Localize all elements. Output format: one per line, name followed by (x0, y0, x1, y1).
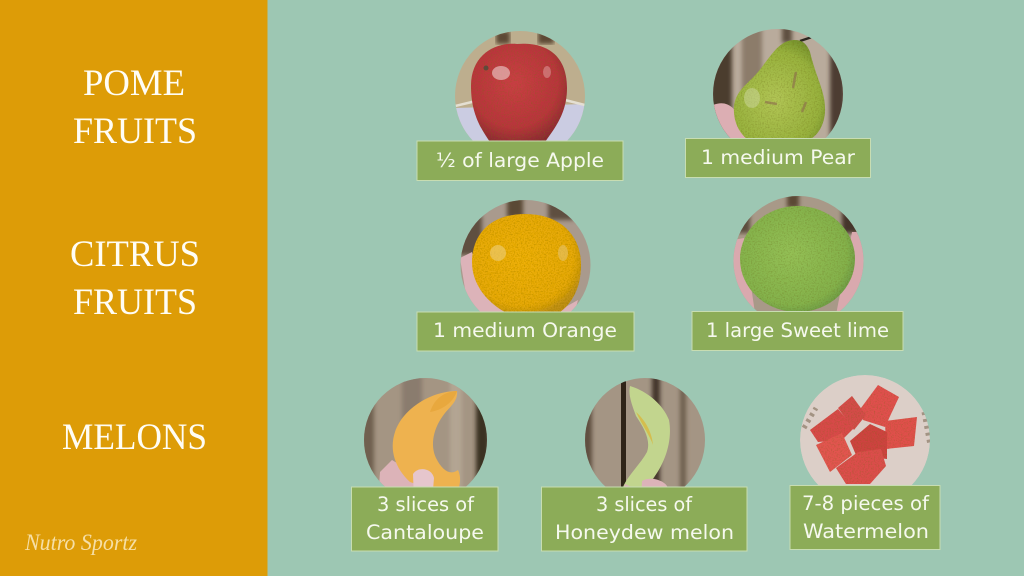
label: cantaloupe: 3 slices of (377, 493, 475, 516)
heading: citrus fruits: FRUITS (73, 282, 197, 323)
photo: apple (455, 31, 585, 140)
label: watermelon: 7-8 pieces of (802, 492, 930, 515)
photo: pear (713, 29, 843, 138)
photo: orange (460, 200, 590, 312)
label: pear (686, 138, 870, 178)
photo: sweet lime (734, 196, 864, 311)
label: watermelon: Watermelon (803, 520, 929, 543)
photo: cantaloupe (364, 378, 487, 486)
label: sweet lime: 1 large Sweet lime (706, 319, 889, 342)
heading: pome fruits: FRUITS (73, 111, 197, 152)
label: orange (417, 312, 634, 351)
brand signature: Nutro Sportz (24, 530, 137, 555)
heading: melons: MELONS (62, 417, 207, 458)
heading: pome fruits (73, 63, 197, 152)
label: sweet lime (692, 312, 903, 350)
label: honeydew melon (542, 487, 747, 551)
photo: honeydew melon (585, 378, 705, 486)
sidebar panel (0, 0, 268, 576)
label: apple (417, 141, 623, 180)
label: watermelon (790, 486, 940, 550)
label: cantaloupe: Cantaloupe (366, 521, 484, 544)
label: orange: 1 medium Orange (433, 319, 617, 342)
heading: citrus fruits (70, 234, 200, 323)
heading: pome fruits: POME (83, 63, 185, 104)
label: honeydew melon: 3 slices of (596, 493, 693, 516)
label: honeydew melon: Honeydew melon (555, 521, 734, 544)
label: apple: ½ of large Apple (436, 149, 604, 172)
heading: citrus fruits: CITRUS (70, 234, 200, 275)
label: cantaloupe (352, 487, 498, 551)
photo: watermelon (800, 375, 930, 485)
label: pear: 1 medium Pear (701, 146, 856, 169)
